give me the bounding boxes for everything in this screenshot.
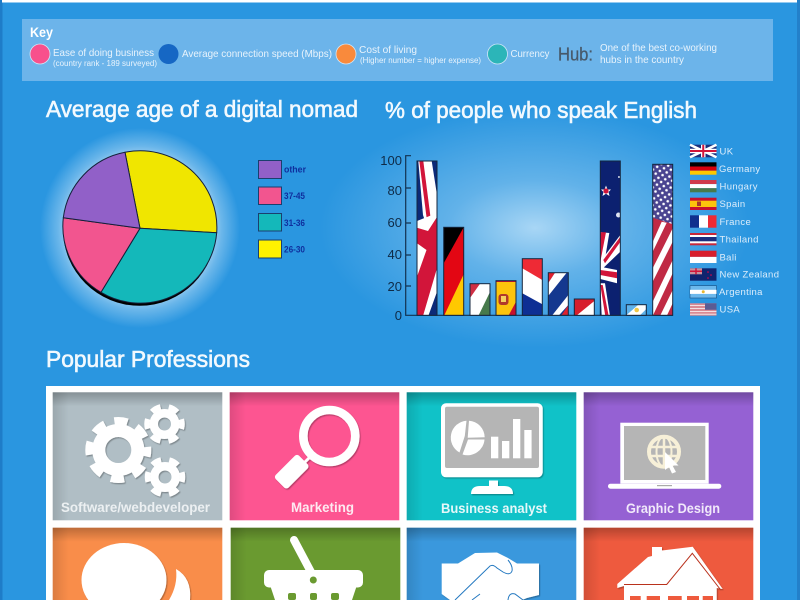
icon: house bbox=[617, 547, 723, 600]
key item: hub: hubs in the country bbox=[600, 54, 685, 66]
bar: UK bbox=[417, 161, 437, 316]
key item: cost of living: (Higher number = higher expense) bbox=[360, 56, 481, 65]
bar: France bbox=[522, 258, 543, 316]
chart axis: 80 bbox=[388, 183, 402, 198]
pie legend: other bbox=[284, 164, 306, 176]
icon: laptop with globe bbox=[608, 423, 721, 489]
label: business analyst: Business analyst bbox=[441, 501, 547, 516]
icon: gears bbox=[90, 406, 182, 494]
legend: Argentina bbox=[690, 286, 763, 298]
tile: communication bbox=[53, 528, 222, 600]
chart axis: 40 bbox=[388, 247, 402, 262]
panel: key bbox=[22, 19, 773, 81]
icon: handshake bbox=[442, 552, 539, 600]
heading: average age: Average age of a digital nomad bbox=[46, 96, 358, 122]
key item: ease of doing business: (country rank - 189 surveyed) bbox=[53, 59, 157, 68]
bar: Bali bbox=[574, 299, 595, 316]
key item: hub bbox=[558, 42, 717, 66]
tile: graphic design bbox=[584, 392, 753, 520]
legend: Hungary bbox=[690, 180, 758, 192]
legend: Bali: Bali bbox=[720, 252, 737, 264]
label: marketing: Marketing bbox=[291, 500, 354, 515]
key heading: Key bbox=[30, 25, 53, 40]
chart axis bbox=[380, 153, 673, 323]
legend: Spain bbox=[690, 198, 746, 210]
legend: New Zealand: New Zealand bbox=[720, 270, 779, 280]
icon: magnifying glass bbox=[274, 410, 355, 490]
chart axis: 100 bbox=[380, 153, 402, 168]
key item: hub: One of the best co-working bbox=[600, 42, 717, 54]
bar: New Zealand bbox=[600, 161, 621, 316]
pie legend: 37-45 bbox=[284, 191, 306, 202]
key item: ease of doing business bbox=[30, 44, 157, 68]
pie chart: age groups bbox=[63, 151, 217, 306]
heading: popular professions: Popular Professions bbox=[46, 346, 250, 372]
pie legend: 26-30 bbox=[284, 244, 305, 256]
tile: retail bbox=[231, 528, 400, 600]
tile: business partnership bbox=[407, 528, 576, 600]
bar: Germany bbox=[443, 227, 464, 316]
key item: connection speed: Average connection speed (Mbps) bbox=[182, 48, 332, 60]
icon: shopping basket bbox=[264, 540, 363, 600]
legend: France bbox=[690, 215, 751, 228]
heading: english speakers: % of people who speak English bbox=[385, 97, 697, 123]
chart axis: 60 bbox=[388, 215, 402, 230]
key item: cost of living: Cost of living bbox=[359, 44, 417, 56]
label: graphic design: Graphic Design bbox=[626, 501, 720, 516]
tile: real estate bbox=[584, 528, 753, 600]
legend: New Zealand bbox=[690, 268, 779, 281]
tile: software developer bbox=[53, 392, 222, 520]
legend: Bali bbox=[690, 251, 737, 264]
legend: USA bbox=[690, 303, 740, 316]
bar: Hungary bbox=[470, 283, 490, 316]
label: software: Software/webdeveloper bbox=[61, 500, 211, 515]
key item: connection speed bbox=[158, 44, 332, 64]
legend: Spain: Spain bbox=[720, 199, 746, 210]
legend: USA: USA bbox=[720, 304, 740, 316]
legend: UK: UK bbox=[720, 146, 734, 158]
legend: Hungary: Hungary bbox=[720, 182, 758, 192]
bar: Argentina bbox=[626, 304, 647, 316]
bar: Spain bbox=[496, 280, 516, 316]
panel: professions grid bbox=[46, 386, 760, 600]
pie legend: 31-36 bbox=[284, 218, 305, 229]
legend: France: France bbox=[720, 217, 751, 228]
key item: ease of doing business: Ease of doing business bbox=[53, 47, 154, 59]
chart axis: 0 bbox=[395, 308, 402, 323]
key item: currency bbox=[488, 44, 550, 64]
key item: currency: Currency bbox=[510, 48, 550, 60]
key item: cost of living bbox=[336, 44, 481, 65]
legend: Thailand: Thailand bbox=[720, 234, 759, 246]
legend: Argentina: Argentina bbox=[719, 287, 763, 298]
pie legend bbox=[258, 160, 306, 258]
legend: Thailand bbox=[690, 233, 759, 246]
bar: Thailand bbox=[548, 272, 569, 316]
legend: Germany: Germany bbox=[719, 164, 761, 175]
background glow: pie chart bbox=[40, 128, 240, 328]
legend: UK bbox=[690, 145, 734, 158]
tile: business analyst bbox=[407, 392, 576, 520]
legend: Germany bbox=[690, 162, 761, 175]
tile: marketing bbox=[230, 392, 399, 520]
chart axis: 20 bbox=[388, 279, 402, 294]
icon: speech bubbles bbox=[82, 543, 190, 600]
bar chart: percent speaking English bbox=[380, 153, 673, 323]
background glow: bar chart bbox=[320, 108, 750, 348]
bar: USA bbox=[652, 164, 673, 316]
icon: monitor with charts bbox=[441, 403, 543, 494]
flag legend bbox=[690, 145, 779, 316]
key item: hub: Hub: bbox=[558, 44, 593, 64]
